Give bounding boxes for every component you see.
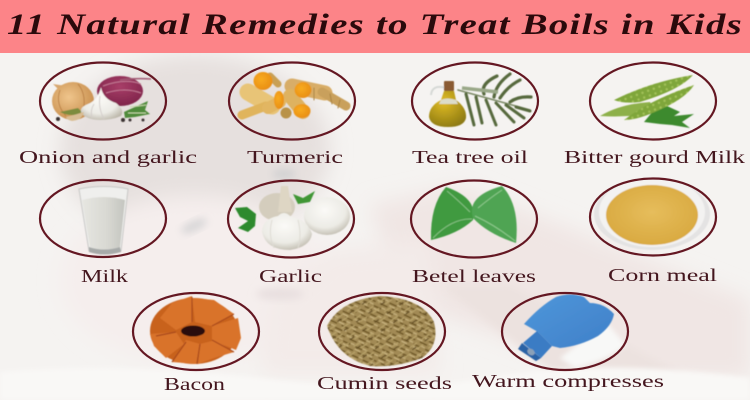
ring (40, 62, 166, 140)
item: tea tree oil (412, 62, 538, 167)
label: Corn meal (608, 265, 717, 285)
item: cumin seeds (317, 293, 452, 393)
ring (133, 293, 259, 370)
label: Bacon (164, 374, 225, 394)
icon: oil bottle and sprig (429, 74, 531, 127)
item: betel leaves (411, 180, 537, 286)
item: corn meal (590, 177, 717, 285)
ring (590, 62, 716, 140)
ring (229, 62, 355, 140)
icon: onions and garlic (52, 76, 151, 122)
label: Onion and garlic (19, 147, 197, 167)
label: Betel leaves (412, 266, 536, 286)
icon: bacon ring (150, 296, 241, 364)
ring (502, 293, 628, 370)
icon: bowl of corn meal (594, 177, 710, 250)
label: Garlic (259, 266, 322, 286)
title banner (0, 0, 750, 53)
label: Cumin seeds (317, 373, 452, 393)
item: garlic (228, 180, 354, 286)
icon: blue hot water bottle (518, 294, 614, 361)
ring (228, 180, 354, 258)
ring (411, 180, 537, 258)
item: milk (40, 180, 166, 286)
ring (412, 62, 538, 140)
ring (319, 293, 445, 370)
label: Tea tree oil (412, 147, 528, 167)
icon: garlic bulbs and parsley (235, 186, 350, 250)
icon: turmeric roots (242, 72, 346, 118)
label: Bitter gourd Milk (564, 147, 745, 167)
ring (40, 180, 166, 257)
icon: pile of cumin seeds (327, 296, 436, 366)
ring (590, 178, 716, 256)
item: turmeric (229, 62, 355, 167)
icon: bitter gourd slices and leaf (600, 75, 694, 128)
label: Turmeric (247, 147, 343, 167)
title: 11 Natural Remedies to Treat Boils in Kids (7, 8, 743, 41)
label: Milk (81, 266, 128, 286)
item: bacon (133, 293, 259, 394)
item: onion and garlic (19, 62, 197, 167)
white highlight inside ring (560, 322, 626, 368)
label: Warm compresses (472, 371, 664, 391)
item: warm compresses (472, 293, 664, 391)
item: bitter gourd (564, 62, 745, 167)
icon: two betel leaves (431, 186, 517, 243)
icon: glass of milk (79, 186, 128, 254)
